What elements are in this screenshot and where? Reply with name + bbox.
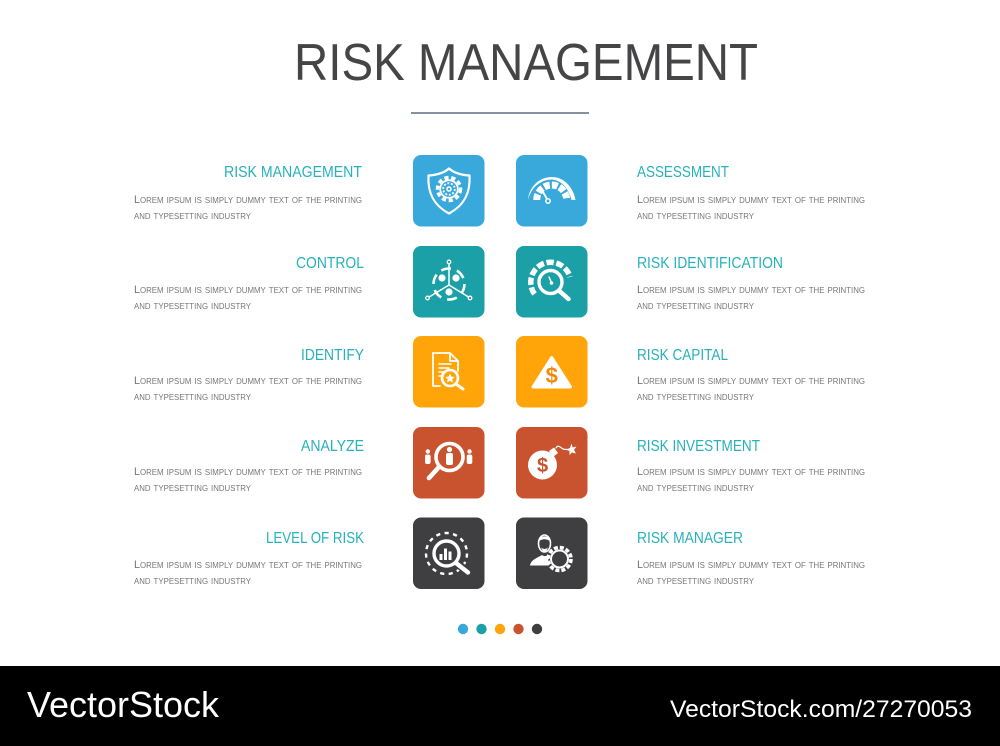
footer bar [0, 666, 1000, 746]
text block: risk investment: Lorem ipsum is simply dummy text of the printing [637, 466, 865, 478]
icon: level of risk magnifier [413, 518, 484, 589]
text block: assessment [637, 194, 865, 222]
footer url: VectorStock.com/27270053 [670, 696, 972, 723]
icon: gauge [516, 155, 588, 226]
pagination dots [458, 624, 542, 634]
heading: control: CONTROL [296, 255, 364, 272]
text block: risk capital [637, 375, 865, 403]
text block: risk identification: Lorem ipsum is simply dummy text of the printing [637, 284, 865, 296]
text block: risk capital: and typesetting industry [637, 391, 755, 403]
right column text [637, 164, 865, 587]
text block: risk manager: and typesetting industry [637, 575, 755, 587]
icon: warning triangle with dollar [516, 336, 588, 408]
heading: risk identification: RISK IDENTIFICATION [637, 255, 783, 272]
icon: bomb with dollar [516, 427, 588, 498]
text block: analyze [134, 466, 362, 494]
text block: control: and typesetting industry [134, 300, 252, 312]
heading: risk manager: RISK MANAGER [637, 530, 743, 547]
icon: document with magnifier [413, 336, 484, 408]
text block: analyze: and typesetting industry [134, 482, 252, 494]
text block: control: Lorem ipsum is simply dummy text of the printing [134, 284, 362, 296]
text block: analyze: Lorem ipsum is simply dummy text of the printing [134, 466, 362, 478]
text block: identify: Lorem ipsum is simply dummy text of the printing [134, 375, 362, 387]
heading: risk investment: RISK INVESTMENT [637, 438, 760, 455]
heading: identify: IDENTIFY [301, 347, 364, 364]
heading: risk management: RISK MANAGEMENT [224, 164, 362, 181]
text block: assessment: and typesetting industry [637, 210, 755, 222]
icon: analyze magnifier with people [413, 427, 484, 498]
text block: risk investment: and typesetting industry [637, 482, 755, 494]
text block: identify [134, 375, 362, 403]
heading: assessment: ASSESSMENT [637, 164, 729, 181]
heading: analyze: ANALYZE [301, 438, 364, 455]
text block: risk identification [637, 284, 865, 312]
icon: warning triangle with dollar: $ [546, 363, 558, 388]
text block: assessment: Lorem ipsum is simply dummy text of the printing [637, 194, 865, 206]
heading: level of risk: LEVEL OF RISK [266, 530, 365, 547]
text block: level of risk [134, 559, 362, 587]
icon: manager with gear [516, 518, 588, 589]
icon: risk identification magnifier [516, 246, 588, 318]
text block: risk manager: Lorem ipsum is simply dummy text of the printing [637, 559, 865, 571]
heading: risk capital: RISK CAPITAL [637, 347, 728, 364]
text block: risk management: Lorem ipsum is simply dummy text of the printing [134, 194, 362, 206]
text block: risk manager [637, 559, 865, 587]
left column text [134, 164, 365, 587]
footer logo: VectorStock [27, 684, 220, 725]
icon: shield with gear [413, 155, 484, 226]
text block: level of risk: and typesetting industry [134, 575, 252, 587]
icon: control arrows and nodes [413, 246, 484, 318]
text block: risk capital: Lorem ipsum is simply dummy text of the printing [637, 375, 865, 387]
title: RISK MANAGEMENT [294, 34, 758, 92]
text block: level of risk: Lorem ipsum is simply dummy text of the printing [134, 559, 362, 571]
text block: risk management: and typesetting industry [134, 210, 252, 222]
text block: risk investment [637, 466, 865, 494]
text block: risk management [134, 194, 362, 222]
text block: risk identification: and typesetting industry [637, 300, 755, 312]
icon: bomb with dollar: $ [537, 455, 548, 477]
text block: identify: and typesetting industry [134, 391, 252, 403]
text block: control [134, 284, 362, 312]
